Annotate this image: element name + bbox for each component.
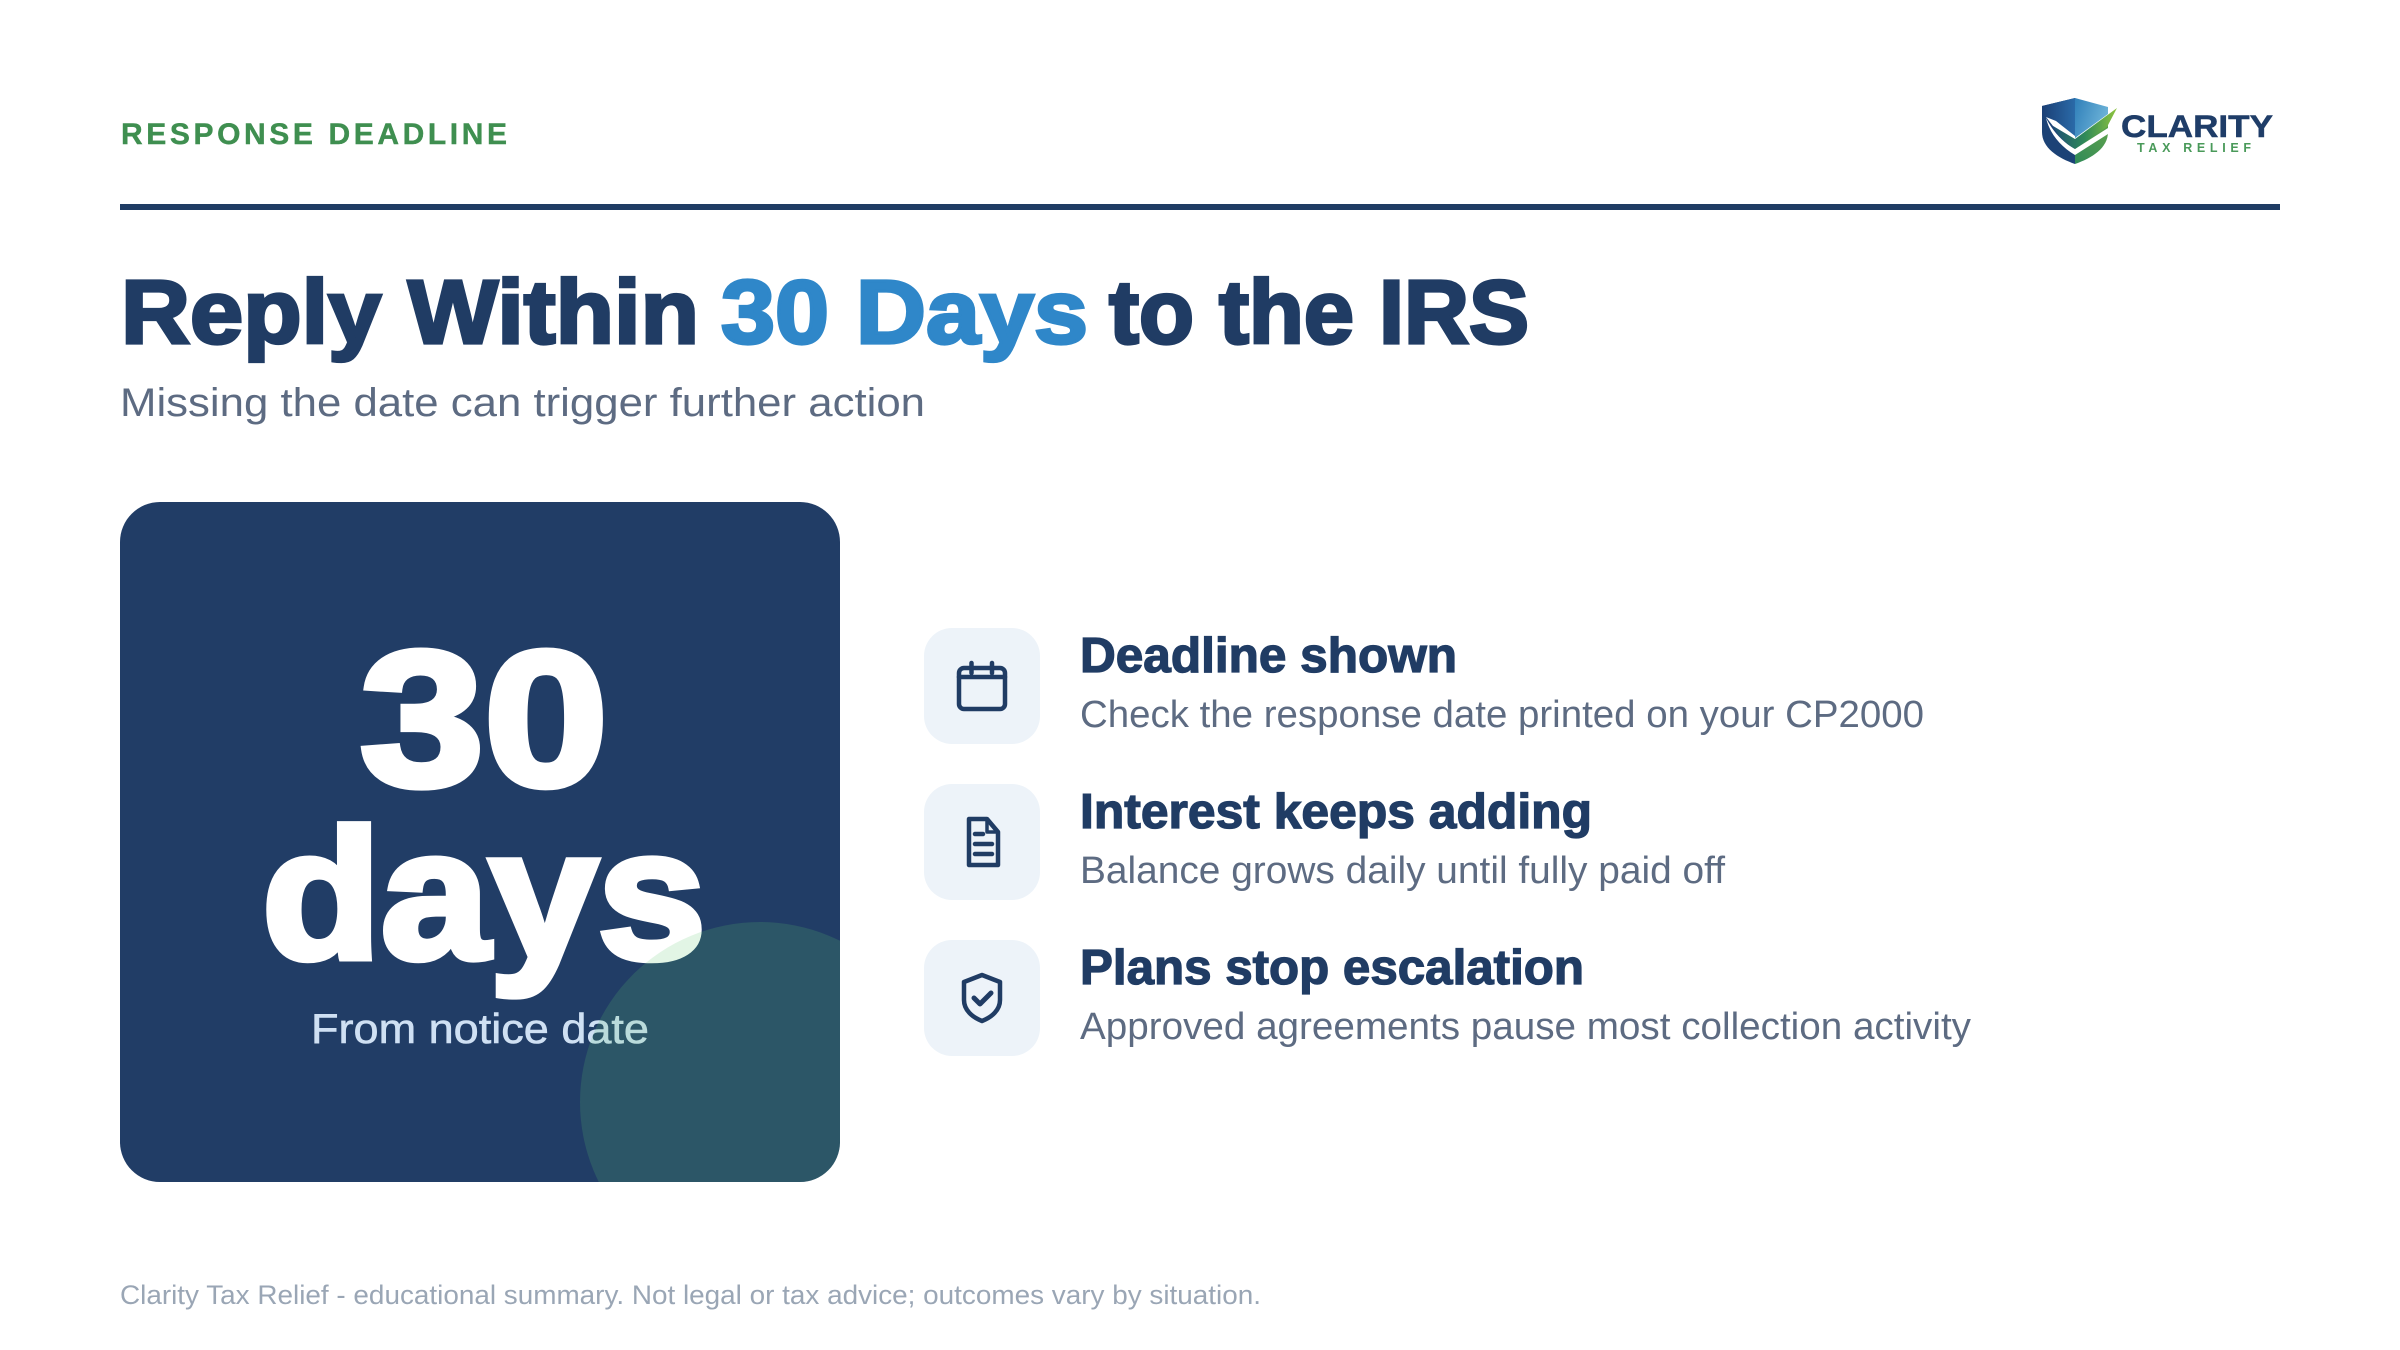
big unit: days xyxy=(262,791,706,997)
subtitle: Missing the date can trigger further action xyxy=(120,381,925,425)
item description: Balance grows daily until fully paid off xyxy=(1080,850,1725,892)
icon: shield check xyxy=(924,940,1040,1056)
list item: interest keeps adding xyxy=(924,784,1725,900)
decorative circle xyxy=(580,922,840,1182)
caption: From notice date xyxy=(311,1005,649,1052)
footer disclaimer: Clarity Tax Relief - educational summary. Not legal or tax advice; outcomes vary by situation. xyxy=(120,1280,1261,1310)
title: Reply Within xyxy=(121,263,699,363)
item description: Check the response date printed on your CP2000 xyxy=(1080,694,1924,736)
title: 30 Days xyxy=(721,263,1088,363)
icon: calendar xyxy=(924,628,1040,744)
big number: 30 xyxy=(360,611,608,826)
item heading: Plans stop escalation xyxy=(1080,941,1584,995)
eyebrow: response deadline: RESPONSE DEADLINE xyxy=(121,118,507,151)
list item: plans stop escalation xyxy=(924,940,1971,1056)
item heading: Deadline shown xyxy=(1080,629,1457,683)
logo: Clarity Tax Relief xyxy=(2042,98,2273,164)
title xyxy=(121,263,1529,363)
item heading: Interest keeps adding xyxy=(1080,785,1592,839)
logo wordmark: CLARITY xyxy=(2121,108,2273,144)
item description: Approved agreements pause most collection activity xyxy=(1080,1006,1971,1048)
logo tagline: TAX RELIEF xyxy=(2137,141,2251,155)
icon: shield with check xyxy=(2042,98,2117,164)
list item: deadline shown xyxy=(924,628,1924,744)
title: to the IRS xyxy=(1109,263,1529,363)
icon: document xyxy=(924,784,1040,900)
panel: 30 days callout xyxy=(120,502,840,1182)
